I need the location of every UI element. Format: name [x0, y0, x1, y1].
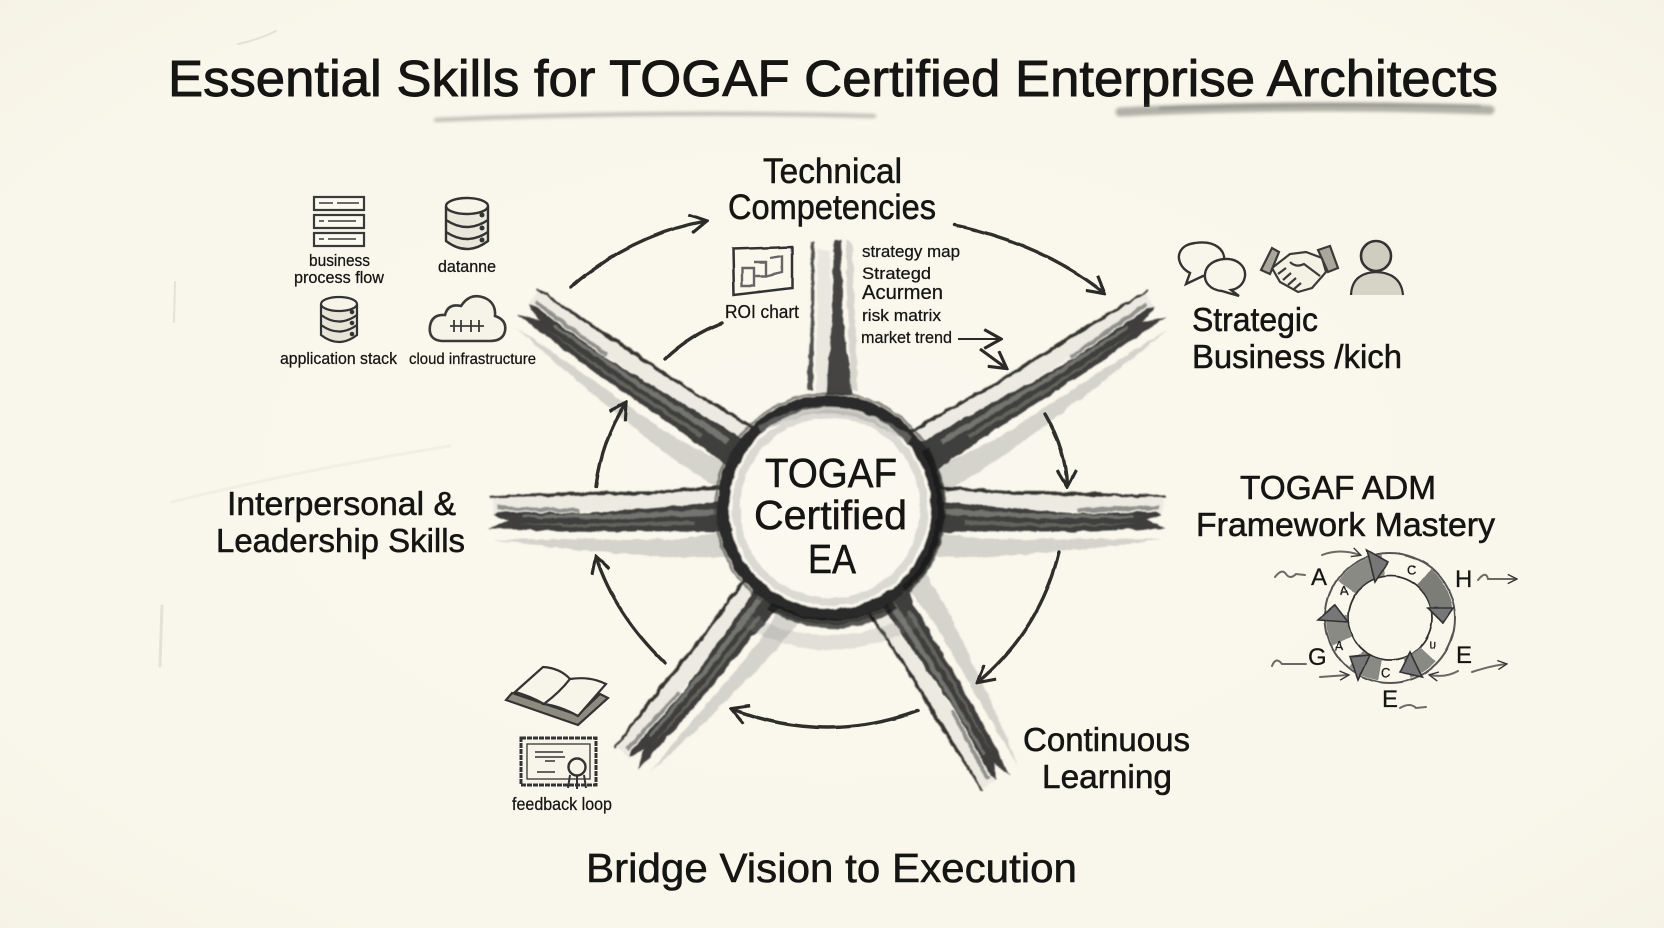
text block: strategic acumen items: strategy map — [862, 242, 960, 261]
icon: certificate — [521, 738, 596, 789]
panel: technical competencies heading — [728, 152, 936, 227]
label: feedback loop: feedback loop — [512, 794, 612, 814]
cycle phase letters — [1308, 564, 1472, 713]
label: business process flow — [294, 252, 384, 287]
label: continuous learning: Learning — [1042, 758, 1172, 795]
icon: person — [1351, 241, 1403, 295]
panel: TOGAF ADM framework mastery — [1196, 469, 1516, 713]
panel: technical competencies heading: Technical — [763, 152, 902, 191]
footer tagline: Bridge Vision to Execution — [586, 845, 1077, 891]
hub label: EA — [808, 536, 857, 582]
title underline strokes — [436, 104, 1490, 120]
heading: TOGAF ADM — [1240, 469, 1436, 506]
text block: strategic acumen items: Acurmen — [862, 282, 943, 304]
label: continuous learning — [1023, 721, 1190, 795]
ADM cycle diagram: A — [1340, 583, 1349, 598]
label: business process flow: business — [309, 252, 370, 270]
panel: continuous learning icons — [506, 667, 612, 814]
label: database: datanne — [438, 258, 496, 276]
heading — [1196, 469, 1496, 543]
label: strategic business: Strategic — [1192, 301, 1318, 338]
arrow: market trend — [958, 339, 1006, 368]
cycle phase letters: G — [1308, 644, 1327, 671]
spokes — [487, 240, 1186, 795]
cycle arrows around the hub — [571, 221, 1104, 728]
cycle squiggles and small arrows — [1272, 552, 1516, 708]
text block: strategic acumen items: market trend — [861, 328, 952, 347]
hub label — [754, 450, 907, 582]
icon: speech bubbles — [1179, 242, 1245, 296]
label: continuous learning: Continuous — [1023, 721, 1190, 758]
ADM cycle diagram: A — [1335, 638, 1344, 653]
cycle phase letters: H — [1455, 566, 1472, 593]
icon: application stack — [321, 297, 357, 342]
icon: open book — [506, 667, 608, 725]
hub label: TOGAF — [765, 450, 897, 496]
hub ring — [715, 393, 945, 642]
heading: Framework Mastery — [1196, 506, 1496, 543]
text block: strategic acumen items: risk matrix — [862, 306, 941, 325]
panel: strategic business — [1179, 241, 1403, 375]
text block: strategic acumen items: Strategd — [862, 264, 931, 283]
text block: strategic acumen items — [861, 242, 960, 347]
icon: database — [446, 198, 488, 249]
icon: cloud — [430, 296, 505, 341]
ADM cycle diagram: C — [1407, 562, 1416, 577]
label: business process flow: process flow — [294, 269, 384, 287]
label: application stack: application stack — [280, 350, 398, 368]
ADM cycle diagram — [1318, 550, 1455, 683]
label: interpersonal and leadership skills: Leadership Skills — [216, 522, 465, 559]
ADM cycle diagram: C — [1381, 665, 1390, 680]
label: strategic business: Business /kich — [1192, 338, 1402, 375]
label: strategic business — [1192, 301, 1402, 375]
label: ROI chart: ROI chart — [725, 302, 799, 322]
panel: technology icons — [280, 197, 536, 368]
cycle phase letters: A — [1311, 564, 1327, 591]
central hub and six charcoal spokes — [487, 240, 1186, 795]
icon: handshake — [1261, 246, 1338, 292]
label: cloud infrastructure: cloud infrastructure — [409, 351, 536, 368]
cycle phase letters: E — [1456, 642, 1472, 669]
label: interpersonal and leadership skills: Interpersonal & — [227, 485, 456, 522]
panel: technical competencies heading: Competencies — [728, 188, 936, 227]
icon: ROI chart frame — [733, 247, 792, 295]
cycle phase letters: E — [1382, 686, 1398, 713]
title: Essential Skills for TOGAF Certified Enterprise Architects — [168, 50, 1498, 107]
ADM cycle diagram: u — [1429, 637, 1436, 651]
hub label: Certified — [754, 492, 907, 538]
label: interpersonal and leadership skills — [216, 485, 465, 559]
icon: business process list — [314, 197, 364, 246]
